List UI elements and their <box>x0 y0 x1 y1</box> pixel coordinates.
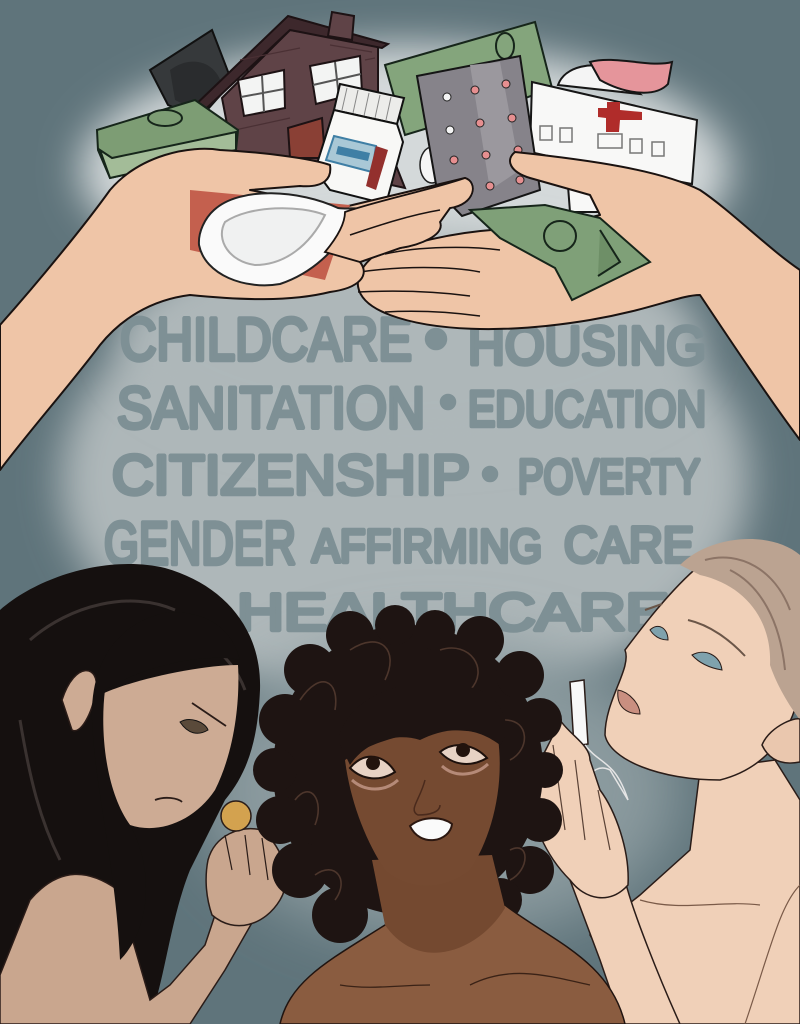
ear <box>62 671 96 731</box>
curl highlights <box>295 642 525 900</box>
person: man with blond hair <box>530 539 800 1024</box>
open mouth <box>410 818 452 840</box>
finger lines <box>225 835 268 880</box>
torso <box>590 760 800 1024</box>
right arm and hand <box>358 152 800 440</box>
icon: cash in right hand <box>470 205 650 300</box>
person: curly haired figure in centre <box>253 605 625 1024</box>
under-eye tint <box>352 764 488 789</box>
nose <box>414 780 440 815</box>
mouth and brow <box>155 703 226 802</box>
hand holding coin <box>206 829 286 926</box>
left arm and hand <box>0 149 473 470</box>
handwritten list of issues <box>104 306 706 642</box>
eye <box>180 720 208 733</box>
person: woman with long black hair <box>0 564 286 1024</box>
shoulders and chest <box>280 905 625 1024</box>
fingers of left hand <box>325 178 473 262</box>
text: sanitation, education <box>117 376 706 441</box>
icon: sanitary pad <box>199 193 363 285</box>
text: childcare, housing <box>120 306 706 376</box>
icon: white round pill behind blister <box>420 147 444 183</box>
icon: cash stack left <box>97 100 238 178</box>
eyes <box>350 745 487 778</box>
body <box>0 874 265 1024</box>
icon: cash stack top right <box>385 22 552 135</box>
bangs <box>338 682 506 765</box>
ear <box>762 719 800 763</box>
eyes <box>650 626 722 670</box>
curly hair <box>253 605 563 943</box>
text: healthcare: HEALTHCARE <box>237 584 669 642</box>
text: gender affirming care <box>104 510 694 577</box>
hair back <box>0 564 260 1018</box>
lips <box>618 690 640 714</box>
hair highlights <box>20 601 245 860</box>
icon: pill blister <box>417 56 540 216</box>
tampon <box>570 680 588 746</box>
front hair <box>92 612 240 960</box>
hair strands <box>705 557 790 670</box>
text: citizenship, poverty <box>112 443 700 506</box>
text: sanitation, education: SANITATION <box>117 376 425 441</box>
text: citizenship, poverty: POVERTY <box>518 451 700 504</box>
text: childcare, housing: HOUSING <box>468 316 706 376</box>
face <box>345 730 500 886</box>
text: citizenship, poverty: CITIZENSHIP <box>112 443 470 506</box>
text: gender affirming care: GENDER <box>104 510 296 577</box>
tampon string <box>585 745 628 800</box>
icon: condom packet <box>150 30 232 118</box>
coin <box>221 801 251 831</box>
hand <box>530 720 628 898</box>
text: gender affirming care: CARE <box>564 517 694 573</box>
text: gender affirming care: AFFIRMING <box>312 520 542 572</box>
collar lines <box>340 973 590 987</box>
brows <box>645 604 745 656</box>
icon: pill bottle <box>315 84 404 204</box>
text: sanitation, education: EDUCATION <box>468 381 706 437</box>
neck <box>372 855 505 953</box>
text: childcare, housing: CHILDCARE <box>120 306 412 373</box>
arm <box>570 880 680 1024</box>
red pad backing <box>190 190 350 280</box>
icon: house <box>188 12 405 188</box>
hair <box>680 539 800 720</box>
pupils <box>366 743 470 770</box>
face <box>605 565 800 780</box>
collar bone lines <box>640 885 800 1024</box>
face <box>100 665 238 828</box>
finger lines <box>553 745 610 850</box>
icon: hospital and tube cap <box>530 60 697 212</box>
